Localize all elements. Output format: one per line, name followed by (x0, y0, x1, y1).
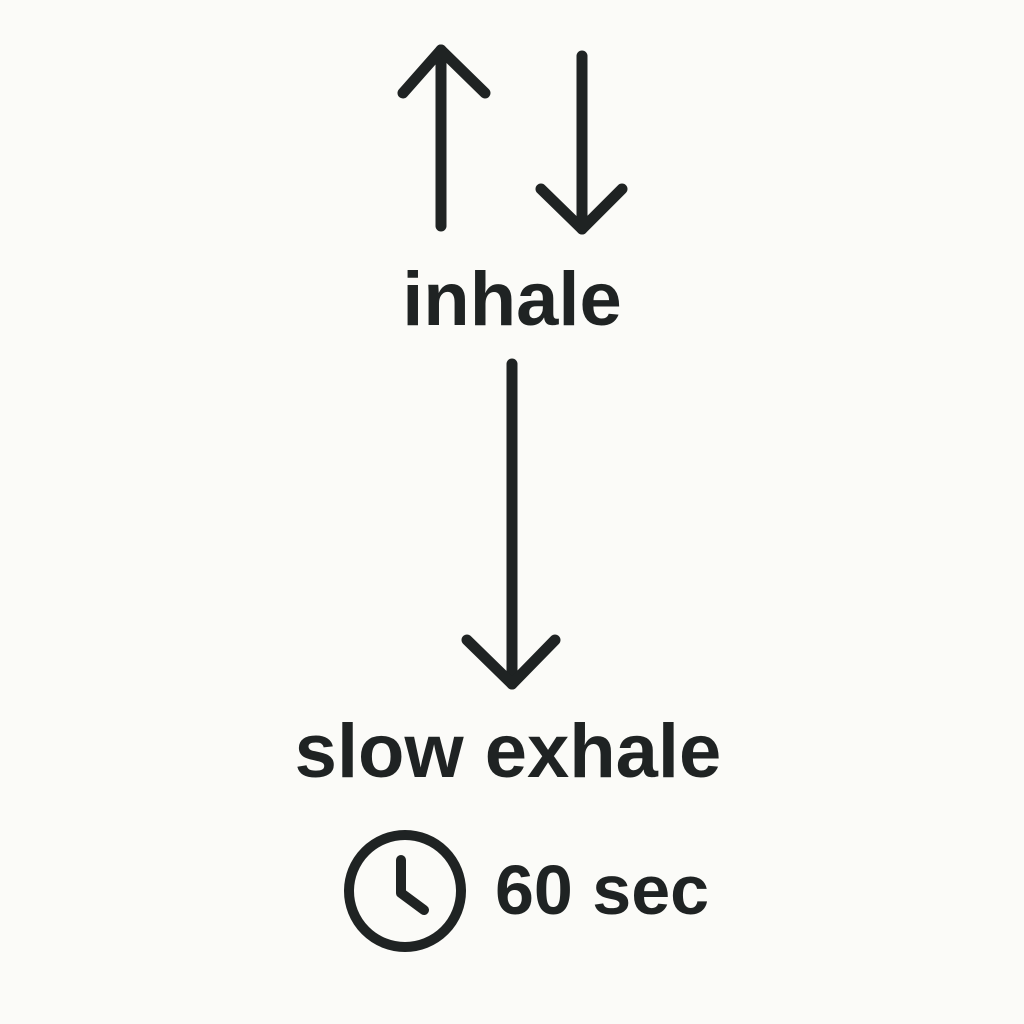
icon: small down arrow (541, 56, 622, 229)
heading: slow exhale: slow exhale (295, 709, 721, 794)
heading: inhale: inhale (402, 257, 622, 342)
icon: up arrow (403, 50, 485, 226)
text: 60 sec: 60 sec (495, 851, 709, 929)
arrow: long down arrow (467, 364, 555, 684)
icon: clock (349, 835, 461, 947)
